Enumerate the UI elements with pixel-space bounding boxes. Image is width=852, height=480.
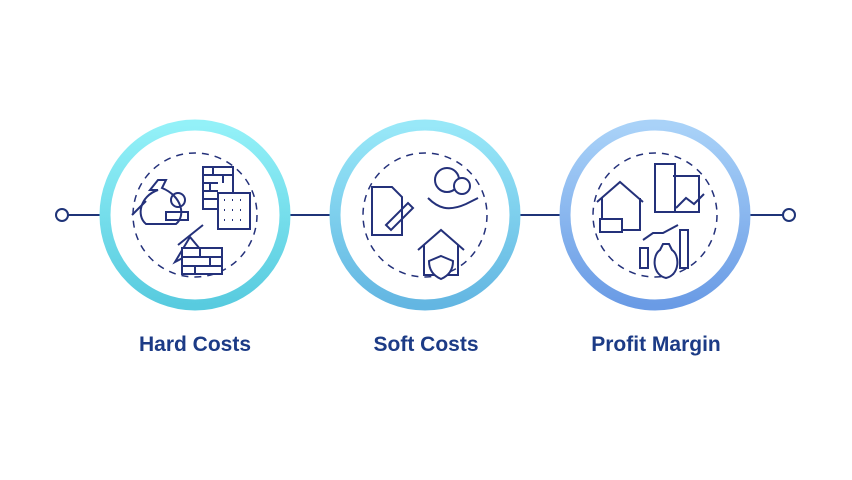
circle: hard costs bbox=[105, 125, 285, 305]
label: soft costs: Soft Costs bbox=[374, 333, 478, 356]
circle: profit margin bbox=[565, 125, 745, 305]
timeline line bbox=[56, 209, 795, 221]
label: hard costs: Hard Costs bbox=[139, 333, 251, 356]
circle: soft costs bbox=[335, 125, 515, 305]
label: profit margin: Profit Margin bbox=[591, 333, 721, 356]
